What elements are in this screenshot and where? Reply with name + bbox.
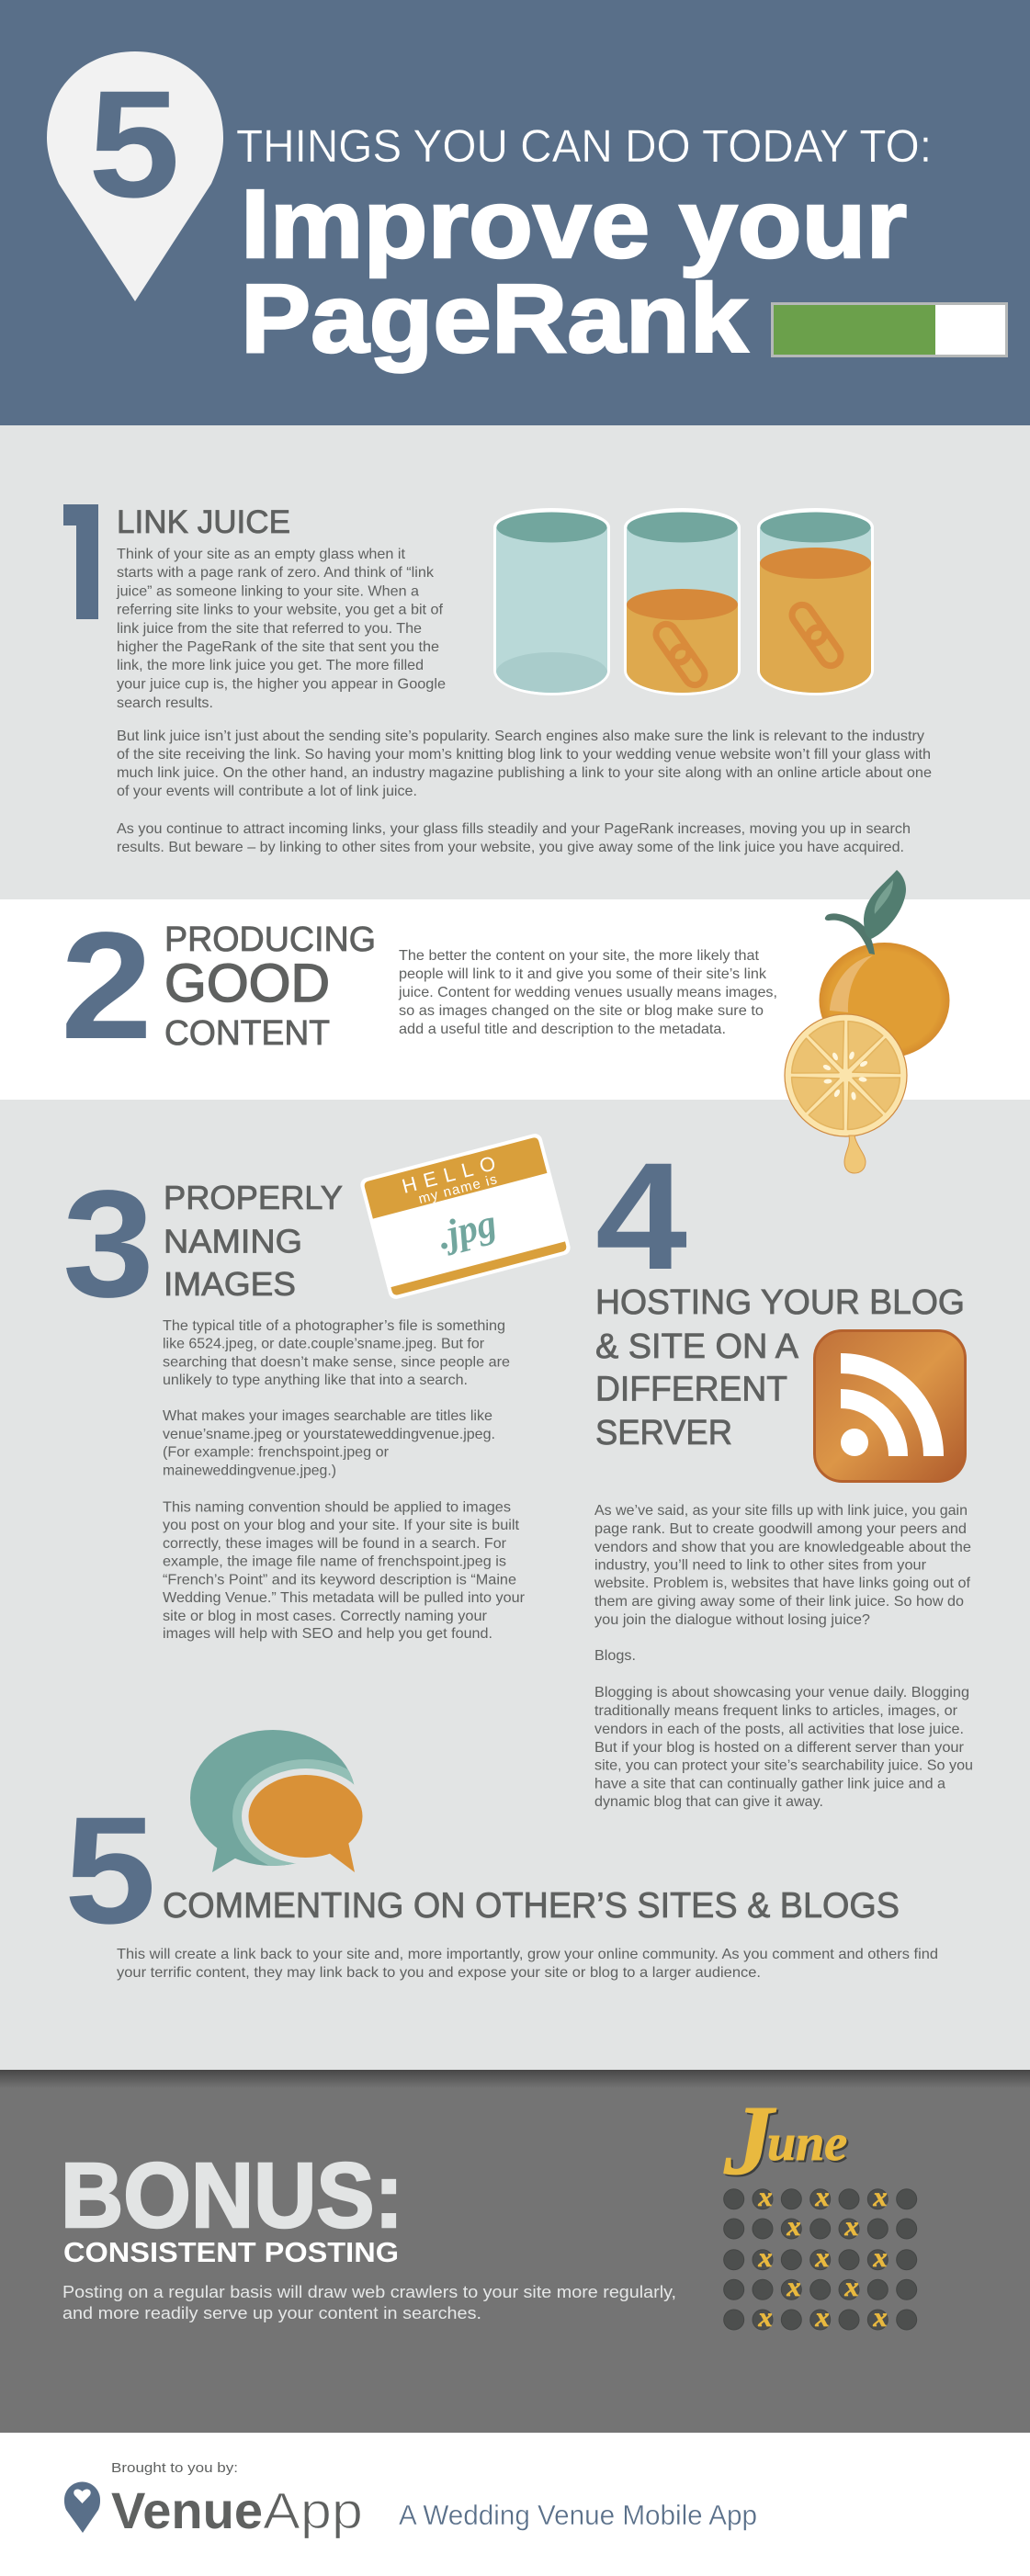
calendar x marks: x bbox=[843, 2211, 858, 2242]
icon: empty glass bbox=[493, 508, 610, 695]
text block: naming paragraph 2: maineweddingvenue.jpeg.) bbox=[163, 1463, 336, 1479]
text block: link juice warning bbox=[117, 821, 911, 855]
logo: VenueApp: Venue bbox=[111, 2481, 263, 2539]
icon: hello name tag bbox=[359, 1132, 572, 1301]
text block: naming paragraph 3: Wedding Venue.” This metadata will be pulled into your bbox=[163, 1590, 526, 1606]
heading: properly naming images: IMAGES bbox=[164, 1265, 296, 1303]
heading: properly naming images bbox=[164, 1179, 343, 1303]
text block: bonus paragraph: Posting on a regular basis will draw web crawlers to your site more regularly, bbox=[62, 2283, 676, 2301]
text block: hosting paragraph 2: vendors in each of the posts, all activities that lose juice. bbox=[594, 1722, 964, 1737]
number 1: 1 bbox=[41, 470, 133, 655]
icon: hello name tag: my name is bbox=[417, 1171, 500, 1207]
icon: rss feed bbox=[814, 1330, 965, 1481]
orange body bbox=[820, 943, 950, 1058]
text block: content paragraph: people will link to it and give you some of their site’s link bbox=[399, 966, 767, 982]
text block: hosting paragraph 1: website. Problem is, websites that have links going out of bbox=[594, 1576, 971, 1591]
heading: hosting your blog bbox=[595, 1283, 965, 1452]
calendar x marks bbox=[757, 2182, 888, 2333]
orange slice bbox=[785, 1014, 907, 1136]
credit line: Brought to you by: bbox=[111, 2460, 238, 2476]
text block: hosting paragraph 1 bbox=[594, 1503, 971, 1628]
text block: hosting paragraph 2: have a site that can continually gather link juice and a bbox=[594, 1777, 945, 1791]
text block: content paragraph: The better the content on your site, the more likely that bbox=[399, 948, 760, 964]
juice drip bbox=[844, 1135, 866, 1173]
calendar x marks: x bbox=[787, 2272, 801, 2302]
number 4: 4 bbox=[595, 1132, 687, 1302]
number 3: 3 bbox=[62, 1159, 154, 1329]
calendar x marks: x bbox=[843, 2272, 858, 2302]
icon: hello name tag: HELLO bbox=[400, 1149, 505, 1198]
text block: hosting paragraph 1: vendors and show that you are knowledgeable about the bbox=[594, 1540, 971, 1555]
heading: properly naming images: NAMING bbox=[164, 1222, 302, 1260]
heading: bonus: BONUS: bbox=[61, 2144, 403, 2247]
icon: venueapp pin with heart bbox=[64, 2482, 100, 2533]
text block: hosting paragraph 1: them are giving away some of their link juice. So how do bbox=[594, 1594, 964, 1610]
heading: hosting your blog: DIFFERENT bbox=[595, 1371, 787, 1409]
text block: commenting paragraph: This will create a link back to your site and, more importantly, grow your online community. As you comment and others find bbox=[117, 1947, 938, 1962]
subtitle: THINGS YOU CAN DO TODAY TO: bbox=[236, 120, 932, 172]
text block: link juice relevance: But link juice isn’t just about the sending site’s popularity. Search engines also make sure the link is relevant to the industry bbox=[117, 729, 924, 744]
title bbox=[241, 170, 907, 373]
icon: orange with slice bbox=[781, 870, 950, 1173]
calendar x marks: x bbox=[814, 2182, 829, 2212]
text block: naming paragraph 2: (For example: frenchspoint.jpeg or bbox=[163, 1444, 390, 1461]
text block: content paragraph: so as images changed on the site or blog make sure to bbox=[399, 1003, 764, 1019]
panel: bonus bbox=[61, 2086, 917, 2333]
text block: bonus paragraph bbox=[62, 2283, 676, 2322]
text block: link juice intro: link, the more link juice you get. The more filled bbox=[117, 658, 424, 673]
text block: link juice intro bbox=[116, 547, 446, 711]
heading: producing good content: GOOD bbox=[164, 954, 330, 1013]
calendar title: June: une bbox=[769, 2117, 849, 2174]
tagline: A Wedding Venue Mobile App bbox=[399, 2499, 757, 2531]
subheading: consistent posting: CONSISTENT POSTING bbox=[63, 2236, 399, 2268]
calendar title: June: J bbox=[725, 2088, 778, 2198]
text block: hosting paragraph 1: page rank. But to create goodwill among your peers and bbox=[594, 1521, 967, 1537]
calendar x marks: x bbox=[873, 2243, 888, 2273]
icon: nearly full glass with link juice bbox=[757, 508, 874, 695]
text block: hosting paragraph 2: Blogging is about showcasing your venue daily. Blogging bbox=[594, 1685, 969, 1700]
text block: link juice intro: referring site links to your website, you get a bit of bbox=[117, 603, 444, 617]
text block: hosting paragraph 2 bbox=[594, 1685, 973, 1810]
text block: bonus paragraph: and more readily serve up your content in searches. bbox=[62, 2304, 481, 2322]
text block: naming paragraph 3: correctly, these images will be found in a search. For bbox=[163, 1536, 507, 1552]
panel: section 1 link juice bbox=[63, 504, 932, 854]
text block: link juice relevance: much link juice. On the other hand, an industry magazine publishing a link to your site along with an online article about one bbox=[117, 765, 932, 781]
text block: naming paragraph 3: you post on your blog and your site. If your site is built bbox=[163, 1518, 520, 1533]
PageRank progress bar bbox=[772, 303, 1007, 356]
text block: naming paragraph 3 bbox=[163, 1499, 526, 1642]
text block: commenting paragraph: your terrific content, they may link back to you and expose your site or blog to a larger audience. bbox=[117, 1965, 761, 1981]
text block: link juice intro: starts with a page rank of zero. And think of “link bbox=[117, 565, 435, 581]
text block: link juice intro: your juice cup is, the higher you appear in Google bbox=[117, 676, 446, 693]
heading: link juice: LINK JUICE bbox=[117, 504, 290, 540]
text block: hosting paragraph 1: industry, you’ll need to link to other sites from your bbox=[594, 1558, 927, 1573]
calendar x marks: x bbox=[814, 2243, 829, 2273]
heading: producing good content: PRODUCING bbox=[164, 921, 376, 959]
text block: naming paragraph 3: site or blog in most cases. Correctly naming your bbox=[163, 1609, 488, 1624]
panel: section 5 commenting bbox=[64, 1730, 938, 1981]
number 5: 5 bbox=[64, 1786, 156, 1956]
calendar title: June: J bbox=[723, 2086, 776, 2196]
heading: hosting your blog: SERVER bbox=[595, 1414, 732, 1452]
text block: content paragraph: juice. Content for wedding venues usually means images, bbox=[398, 985, 777, 1000]
text block: naming paragraph 3: “French’s Point” and its keyword description is “Maine bbox=[163, 1573, 516, 1587]
icon: half-full glass with link juice bbox=[624, 508, 741, 695]
calendar x marks: x bbox=[787, 2211, 801, 2242]
text block: naming paragraph 2: venue’sname.jpeg or yourstateweddingvenue.jpeg. bbox=[163, 1427, 495, 1442]
text block: hosting paragraph 2: dynamic blog that can give it away. bbox=[594, 1794, 823, 1810]
panel: section 4 hosting your blog bbox=[594, 1132, 973, 1810]
text block: hosting paragraph 1: you join the dialogue without losing juice? bbox=[594, 1612, 870, 1628]
text block: hosting paragraph 1: As we’ve said, as your site fills up with link juice, you gain bbox=[594, 1503, 968, 1519]
text block: link juice intro: link juice from the site that referred to you. The bbox=[117, 621, 422, 637]
number 1 bbox=[63, 504, 98, 619]
number 2: 2 bbox=[61, 901, 153, 1071]
heading: properly naming images: PROPERLY bbox=[164, 1179, 343, 1216]
title: Improve your bbox=[241, 170, 907, 278]
text block: blogs: Blogs. bbox=[594, 1648, 636, 1664]
text block: hosting paragraph 2: site, you can protect your site’s searchability juice. So you bbox=[594, 1758, 973, 1773]
title: PageRank bbox=[241, 265, 749, 373]
calendar x marks: x bbox=[757, 2302, 772, 2333]
icon: hello name tag: .jpg bbox=[434, 1203, 501, 1258]
text block: naming paragraph 1 bbox=[163, 1318, 510, 1388]
calendar x marks: x bbox=[814, 2302, 829, 2333]
heading: hosting your blog: HOSTING YOUR BLOG bbox=[595, 1283, 965, 1322]
text block: link juice relevance bbox=[117, 729, 932, 799]
text block: link juice relevance: of the site receiving the link. So having your mom’s knitting blog link to your wedding venue website won’t fill your glass with bbox=[117, 747, 931, 763]
text block: naming paragraph 3: example, the image file name of frenchspoint.jpeg is bbox=[163, 1554, 506, 1569]
icon: speech bubbles bbox=[190, 1730, 379, 1873]
text block: hosting paragraph 2: But if your blog is hosted on a different server than your bbox=[594, 1740, 965, 1756]
text block: link juice warning: As you continue to attract incoming links, your glass fills steadily and your PageRank increases, moving you up in search bbox=[117, 821, 911, 837]
text block: link juice intro: Think of your site as an empty glass when it bbox=[117, 547, 406, 562]
logo: VenueApp: App bbox=[263, 2481, 363, 2539]
icon: map pin with number 5 bbox=[47, 51, 223, 301]
leaf and stem bbox=[825, 913, 875, 955]
heading: hosting your blog: & SITE ON A bbox=[595, 1328, 799, 1366]
calendar title: June: une bbox=[767, 2115, 847, 2172]
text block: link juice warning: results. But beware – by linking to other sites from your website, you give away some of the link juice you have acquired. bbox=[117, 840, 904, 855]
text block: naming paragraph 3: This naming convention should be applied to images bbox=[163, 1499, 511, 1516]
calendar title: June bbox=[723, 2086, 849, 2198]
calendar x marks: x bbox=[757, 2243, 772, 2273]
text block: hosting paragraph 2: traditionally means frequent links to articles, images, or bbox=[594, 1703, 958, 1719]
panel: footer bbox=[64, 2460, 757, 2539]
icon: map pin with number 5: 5 bbox=[88, 60, 180, 230]
calendar x marks: x bbox=[757, 2182, 772, 2212]
calendar x marks: x bbox=[873, 2182, 888, 2212]
text block: naming paragraph 2 bbox=[163, 1408, 495, 1479]
panel: section 3 properly naming images bbox=[62, 1132, 572, 1642]
heading: producing good content bbox=[164, 921, 376, 1053]
text block: content paragraph bbox=[398, 948, 777, 1037]
text block: commenting paragraph bbox=[117, 1947, 938, 1981]
heading: producing good content: CONTENT bbox=[164, 1014, 330, 1053]
text block: link juice relevance: of your events will contribute a lot of link juice. bbox=[117, 784, 417, 799]
logo: VenueApp bbox=[111, 2481, 363, 2539]
text block: naming paragraph 2: What makes your images searchable are titles like bbox=[163, 1408, 492, 1424]
calendar dots bbox=[724, 2189, 917, 2330]
calendar x marks: x bbox=[873, 2302, 888, 2333]
text block: link juice intro: search results. bbox=[117, 695, 213, 711]
panel: section 2 producing good content bbox=[61, 870, 950, 1173]
heading: commenting: COMMENTING ON OTHER’S SITES & BLOGS bbox=[163, 1886, 900, 1926]
text block: content paragraph: add a useful title and description to the metadata. bbox=[399, 1022, 726, 1037]
text block: naming paragraph 1: The typical title of a photographer’s file is something bbox=[163, 1318, 505, 1334]
text block: link juice intro: higher the PageRank of the site that sent you the bbox=[117, 639, 439, 655]
text block: naming paragraph 1: unlikely to type anything like that into a search. bbox=[163, 1373, 468, 1388]
text block: naming paragraph 1: searching that doesn’t make sense, since people are bbox=[163, 1354, 510, 1371]
text block: naming paragraph 1: like 6524.jpeg, or date.couple’sname.jpeg. But for bbox=[163, 1336, 485, 1352]
header panel bbox=[47, 51, 1007, 373]
text block: naming paragraph 3: images will help with SEO and help you get found. bbox=[163, 1626, 492, 1642]
text block: link juice intro: juice” as someone linking to your site. When a bbox=[116, 584, 419, 599]
